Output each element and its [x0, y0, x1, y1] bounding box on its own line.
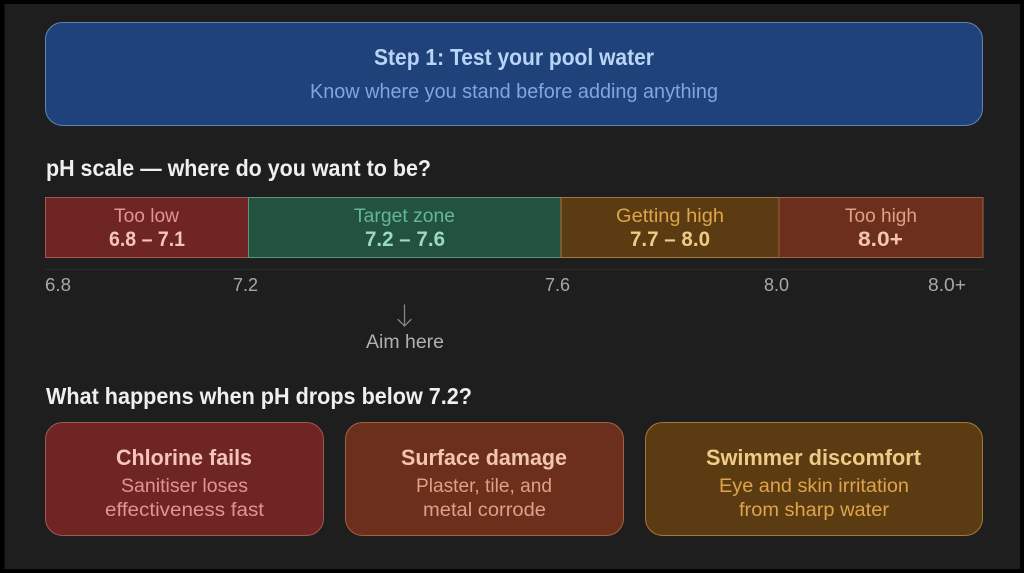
segment: too high: 8.0+: [858, 228, 903, 251]
segment: target zone: [248, 198, 561, 258]
icon: arrow pointing down to target: [398, 305, 411, 326]
heading: what happens: What happens when pH drops below 7.2?: [46, 383, 472, 409]
panel: surface damage: Surface damage: [401, 445, 567, 470]
panel: swimmer discomfort: from sharp water: [739, 500, 890, 521]
panel: swimmer discomfort: [646, 422, 982, 536]
segment: too high: [779, 198, 983, 258]
scale tick labels: 6.8: [45, 275, 71, 295]
panel: step header: [46, 22, 982, 126]
panel: chlorine fails: effectiveness fast: [105, 500, 265, 521]
panel: surface damage: [346, 422, 624, 536]
panel: surface damage: metal corrode: [423, 500, 546, 521]
segment: getting high: [561, 198, 779, 258]
segment: too high: Too high: [845, 206, 917, 227]
segment: target zone: Target zone: [354, 206, 455, 227]
scale tick labels: 8.0+: [928, 275, 966, 295]
panel: swimmer discomfort: Swimmer discomfort: [706, 445, 922, 470]
heading: pH scale: pH scale — where do you want to be?: [46, 155, 431, 181]
segment: too low: 6.8 – 7.1: [109, 228, 185, 251]
scale tick labels: 7.2: [233, 275, 258, 295]
panel: chlorine fails: [46, 422, 324, 536]
segment: target zone: 7.2 – 7.6: [365, 228, 445, 251]
segment: too low: Too low: [114, 206, 179, 227]
label: aim here: Aim here: [366, 332, 444, 353]
scale tick labels: [45, 275, 966, 295]
segment: getting high: 7.7 – 8.0: [630, 228, 710, 251]
scale tick labels: 8.0: [764, 275, 789, 295]
segment: too low: [46, 198, 248, 258]
segment: getting high: Getting high: [616, 206, 724, 227]
chart: pH scale bar: [46, 198, 983, 258]
subtitle: Know where you stand before adding anything: [310, 81, 718, 103]
panel: chlorine fails: Sanitiser loses: [121, 476, 248, 497]
panel: chlorine fails: Chlorine fails: [116, 445, 252, 470]
panel: surface damage: Plaster, tile, and: [416, 476, 552, 497]
scale tick labels: 7.6: [545, 275, 570, 295]
heading: step title: Step 1: Test your pool water: [374, 44, 654, 70]
panel: swimmer discomfort: Eye and skin irritation: [719, 476, 909, 497]
